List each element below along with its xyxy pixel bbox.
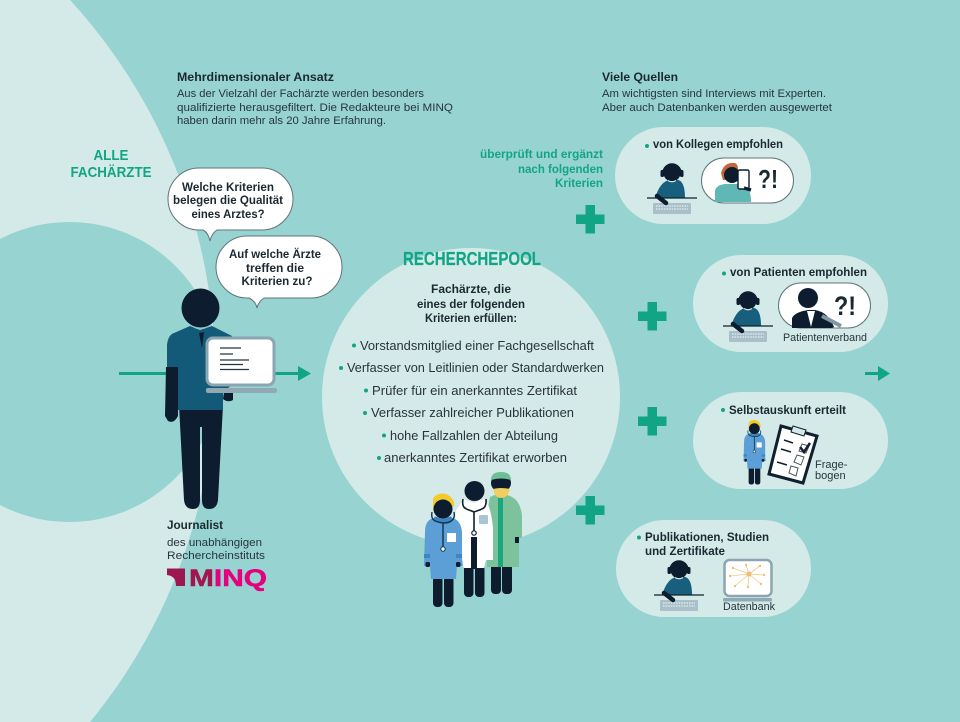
speech bubble: Ärzte: Kriterien zu? (242, 276, 312, 288)
panel: Publikationen, Studien und Zertifikate: Publikationen, Studien (645, 532, 769, 544)
icon: journalist at desk (654, 561, 704, 611)
text block: überprüft und ergänzt (480, 149, 603, 190)
icon: journalist at desk (647, 164, 697, 214)
text block: Mehrdimensionaler Ansatz: qualifizierte herausgefiltert. Die Redakteure bei MINQ (177, 102, 453, 114)
speech bubble: Qualität: eines Arztes? (192, 209, 264, 221)
heading: Recherchepool: RECHERCHEPOOL (403, 249, 541, 269)
text block: Fachärzte intro: Fachärzte, die (431, 284, 511, 296)
figures: doctors (424, 472, 522, 607)
panel: von Patienten empfohlen (693, 255, 888, 352)
panel: von Patienten empfohlen: von Patienten empfohlen (730, 267, 867, 279)
panel: alle Fachärzte (0, 0, 215, 722)
icon: nurse (744, 420, 766, 485)
text block: Journalist: Rechercheinstituts (167, 550, 266, 562)
figure: journalist (165, 288, 277, 509)
heading: alle Fachärzte: FACHÄRZTE (70, 164, 152, 181)
speech bubble: Ärzte: Auf welche Ärzte (229, 248, 321, 261)
panel: von Patienten empfohlen: Patientenverband (783, 332, 867, 344)
panel: Selbstauskunft erteilt: bogen (815, 470, 846, 482)
text block: überprüft und ergänzt: überprüft und ergänzt (480, 149, 603, 161)
text block: Viele Quellen (602, 72, 832, 114)
arrow: out of journalist (272, 366, 311, 381)
speech bubble: Qualität: belegen die Qualität (173, 195, 283, 207)
icon: patient representative: ?! (834, 291, 856, 321)
panel: Selbstauskunft erteilt: Frage- (815, 459, 848, 471)
icon: patient representative (778, 283, 870, 328)
arrow: right exit (865, 366, 890, 381)
list: criteria: Vorstandsmitglied einer Fachgesellschaft (360, 339, 595, 353)
panel: Selbstauskunft erteilt (693, 392, 888, 489)
icon: questionnaire clipboard (769, 426, 817, 483)
panel: von Kollegen empfohlen (615, 127, 811, 224)
list: criteria: Verfasser zahlreicher Publikationen (371, 406, 574, 420)
text block: Fachärzte intro: Kriterien erfüllen: (425, 313, 517, 325)
text block: Viele Quellen: Aber auch Datenbanken werden ausgewertet (602, 102, 832, 114)
heading: alle Fachärzte (70, 147, 152, 181)
text block: Viele Quellen: Am wichtigsten sind Interviews mit Experten. (602, 88, 826, 100)
text block: Journalist: des unabhängigen (167, 537, 262, 549)
text block: Fachärzte intro: eines der folgenden (417, 299, 525, 311)
panel: recherchepool circle (322, 248, 620, 546)
icon: database monitor (723, 560, 772, 602)
list: criteria: hohe Fallzahlen der Abteilung (390, 429, 558, 443)
icon: doctor with phone (702, 158, 794, 203)
icon: journalist at desk (723, 292, 773, 342)
text block: Mehrdimensionaler Ansatz: Aus der Vielzahl der Fachärzte werden besonders (177, 88, 424, 100)
panel: Selbstauskunft erteilt: Selbstauskunft erteilt (729, 405, 846, 417)
text block: überprüft und ergänzt: nach folgenden (518, 164, 603, 176)
figure: physician (452, 481, 493, 597)
text block: überprüft und ergänzt: Kriterien (555, 178, 603, 190)
plus signs (576, 205, 666, 524)
text block: Journalist (167, 520, 266, 562)
text block: Mehrdimensionaler Ansatz: Mehrdimensionaler Ansatz (177, 72, 334, 84)
speech bubble: Qualität: Welche Kriterien (182, 182, 274, 194)
logo: MINQ (167, 565, 267, 592)
panel: Publikationen, Studien und Zertifikate: Datenbank (723, 601, 775, 613)
heading: alle Fachärzte: ALLE (94, 147, 128, 164)
text block: Viele Quellen: Viele Quellen (602, 72, 678, 84)
icon: doctor with phone: ?! (758, 164, 778, 194)
arrow: into journalist (119, 372, 174, 375)
text block: Mehrdimensionaler Ansatz (177, 72, 453, 127)
list: criteria: Prüfer für ein anerkanntes Zertifikat (372, 384, 578, 398)
logo: MINQ: MINQ (189, 565, 267, 592)
panel: Publikationen, Studien und Zertifikate (616, 520, 811, 617)
text block: Journalist: Journalist (167, 520, 223, 532)
speech bubble: Qualität (168, 168, 293, 241)
text block: Mehrdimensionaler Ansatz: haben darin mehr als 20 Jahre Erfahrung. (177, 115, 386, 127)
speech bubble: Ärzte: treffen die (246, 263, 304, 275)
figure: surgeon (486, 472, 522, 594)
panel: inner circle (0, 222, 219, 522)
panel: Publikationen, Studien und Zertifikate: und Zertifikate (645, 546, 725, 558)
list: criteria: Verfasser von Leitlinien oder Standardwerken (347, 361, 604, 375)
text block: Fachärzte intro (417, 284, 525, 325)
panel: von Kollegen empfohlen: von Kollegen empfohlen (653, 139, 783, 151)
speech bubble: Ärzte (216, 236, 342, 308)
list: criteria (339, 339, 604, 465)
list: criteria: anerkanntes Zertifikat erworben (384, 451, 567, 465)
figure: nurse (424, 494, 463, 607)
